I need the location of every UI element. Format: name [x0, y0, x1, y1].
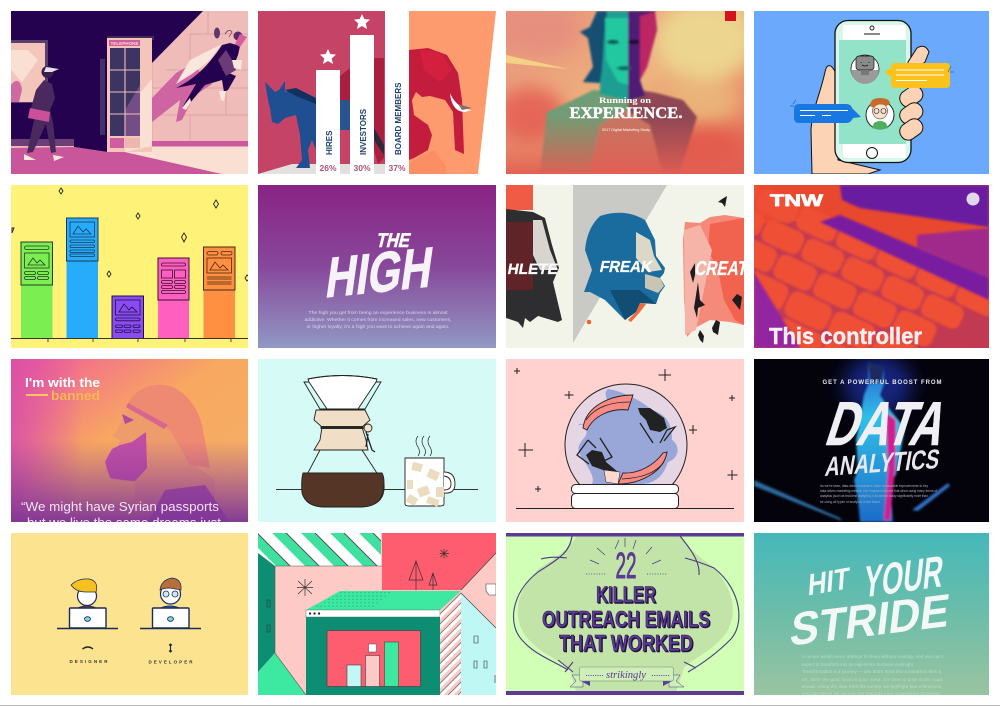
bottom shade — [11, 440, 248, 522]
sparkles — [297, 549, 449, 596]
chemex — [302, 376, 384, 507]
outline curves — [514, 536, 739, 672]
body copy: data-driven marketing metrics. Our research showed that when using many forms of — [820, 489, 937, 493]
black background — [754, 359, 989, 522]
word your: YOUR — [861, 547, 946, 608]
figure: runner — [176, 28, 247, 110]
red panel — [382, 533, 496, 590]
headline — [542, 582, 710, 656]
body copy: As we've seen, data-driven marketers make measurable improvements to key — [820, 484, 928, 488]
lit floor — [125, 146, 248, 174]
heading line one: I'm with the — [25, 375, 100, 390]
title line one: Running on — [599, 95, 651, 105]
purple gradient background — [258, 185, 496, 348]
headline line three: THAT WORKED — [559, 630, 693, 656]
hand behind — [811, 66, 880, 174]
panel: hit your stride — [754, 533, 989, 696]
icon: star over hires — [320, 49, 336, 64]
elephant — [340, 48, 472, 174]
body copy: ahead. Using the data from the survey, we highlight four milestones — [802, 684, 941, 689]
side stripes — [440, 591, 461, 695]
roof edges — [461, 553, 496, 628]
brush title — [787, 547, 953, 656]
floor line — [516, 508, 734, 510]
dash — [26, 394, 48, 396]
table line — [276, 488, 478, 490]
bar: orange — [204, 247, 235, 338]
speech tag — [486, 584, 496, 595]
brush word analytics: ANALYTICS — [823, 443, 942, 482]
body copy: you can strive for as you run towards your experience business. — [802, 691, 941, 696]
floor — [11, 147, 222, 174]
panel: telephone booth runner — [11, 11, 248, 174]
icon: curved arrow — [82, 647, 93, 649]
dark shadow — [11, 11, 203, 152]
pink background — [506, 359, 744, 522]
fingers — [897, 46, 929, 143]
figure: designer — [57, 579, 118, 628]
body copy: be using all types of analytics in the future. — [820, 500, 881, 504]
red field — [258, 11, 385, 174]
mug — [405, 436, 455, 507]
bubble: blue message — [794, 104, 861, 123]
panel: data analytics — [754, 359, 989, 522]
heading line two: banned — [51, 388, 100, 403]
hires label: HIRES — [325, 130, 334, 155]
portrait: bearded athlete — [506, 209, 562, 328]
word freak: FREAK — [598, 258, 654, 276]
icon: adobe logo — [725, 11, 736, 21]
figure head — [580, 11, 657, 100]
portrait: creator — [683, 215, 750, 337]
green triangle — [258, 653, 306, 695]
icon: tree large — [409, 561, 423, 590]
board members value: 37% — [388, 163, 406, 173]
headline line one: KILLER — [596, 582, 656, 608]
window controls — [310, 612, 319, 615]
brand name: strikingly — [606, 670, 647, 681]
body copy — [802, 654, 944, 696]
person upper — [583, 395, 675, 443]
phone — [835, 20, 911, 162]
heading — [25, 375, 100, 403]
body copy: A runner would never attempt to sleep without training. And you can't — [802, 654, 944, 659]
brush word the: THE — [374, 230, 413, 252]
kicker: GET A POWERFUL BOOST FROM — [822, 380, 942, 386]
orange dot — [587, 320, 591, 324]
label: developer: DEVELOPER — [148, 660, 193, 664]
telephone booth — [100, 36, 154, 152]
dark green screen — [306, 617, 440, 695]
panel: tnw this controller — [754, 185, 989, 349]
mint background — [258, 359, 496, 522]
hires value: 26% — [319, 163, 337, 173]
red field — [754, 185, 989, 348]
sparkle diamonds — [12, 188, 250, 281]
light streak — [506, 55, 568, 69]
globe — [565, 384, 687, 485]
panel: athlete freak creator portraits — [506, 185, 750, 348]
bar: investors — [350, 35, 374, 174]
number 22: 22 — [616, 545, 636, 586]
figure: walker — [24, 66, 64, 161]
panel: yellow bar chart of wireframes — [11, 185, 248, 348]
body copy: The high you get from being an experience business is almost — [308, 310, 448, 316]
icon: power dial — [966, 192, 980, 206]
green background — [506, 533, 744, 695]
bottom edge rule — [0, 705, 1000, 706]
purple areas — [754, 185, 989, 348]
yellow background — [11, 533, 248, 695]
headline: This controller — [769, 323, 922, 349]
spark marks — [790, 66, 954, 106]
quote line one: “We might have Syrian passports — [21, 499, 220, 514]
icon: tree small — [429, 573, 437, 590]
panel: chemex coffee maker — [258, 359, 496, 522]
icon: robot avatar — [851, 55, 879, 84]
wall outline — [275, 566, 382, 695]
halo — [844, 355, 912, 415]
pale blob — [518, 536, 733, 695]
globe base — [572, 484, 678, 508]
panel: running on experience — [506, 11, 744, 174]
birds — [690, 196, 742, 343]
icon: vertical arrow — [169, 644, 172, 652]
panel: killer outreach emails — [506, 533, 744, 695]
blue background — [754, 11, 989, 174]
bottom band — [506, 691, 744, 695]
booth label: TELEPHONE — [110, 41, 138, 46]
figure: running shadow — [152, 64, 212, 122]
teal gradient background — [754, 533, 989, 695]
portrait — [105, 385, 230, 522]
bar: blue — [66, 218, 98, 338]
ray lines — [590, 538, 661, 564]
word athlete: HLETE — [506, 261, 559, 278]
striped roof — [258, 533, 381, 566]
red strip — [506, 185, 533, 210]
word hit: HIT — [807, 561, 851, 603]
poster — [11, 40, 48, 103]
word stride: STRIDE — [787, 584, 953, 656]
body copy — [304, 310, 452, 330]
body copy: analytics (such as real-time analytics), it increased today significantly more than — [820, 494, 928, 498]
bar: green — [21, 242, 52, 338]
brick lines — [152, 11, 248, 152]
body copy: addictive. Whether it comes from increased sales, new customers, — [304, 317, 452, 323]
panel: board members bar chart with donkey and elephant — [258, 11, 496, 174]
label: designer: DESIGNER — [70, 659, 108, 664]
panel: designer and developer — [11, 533, 248, 695]
blue blob — [578, 389, 678, 484]
dotted rules — [586, 573, 667, 575]
bar chart — [327, 630, 420, 686]
body copy: 5K. With the goal fixed in your mind, it's time to look to the road — [802, 677, 943, 682]
grey wedge — [573, 185, 667, 343]
investors value: 30% — [353, 163, 371, 173]
paper background — [506, 185, 744, 348]
gradient background — [11, 359, 248, 522]
axis — [11, 338, 248, 342]
dark green wall — [258, 553, 275, 672]
light streaks — [754, 480, 950, 521]
bar: pink — [158, 258, 189, 338]
subtitle: 2017 Digital Marketing Study — [602, 128, 650, 132]
panel: i'm with the banned — [11, 359, 248, 530]
bar: board members — [385, 11, 409, 174]
grey floor — [258, 164, 385, 174]
quote line two: but we live the same dreams just — [27, 515, 221, 530]
roof dots — [312, 592, 392, 608]
bar: purple — [112, 296, 144, 338]
icon: star over investors — [354, 14, 370, 29]
tnw logo: TNW — [770, 191, 824, 210]
wall — [11, 11, 248, 174]
left tint — [11, 359, 131, 522]
pink base — [258, 533, 496, 695]
donkey — [265, 81, 384, 168]
lower haze — [506, 115, 744, 174]
low wall — [11, 139, 74, 146]
small windows — [267, 600, 270, 632]
top band — [506, 533, 744, 536]
brush title — [322, 230, 437, 311]
panel: snow globe — [506, 359, 744, 522]
orange field — [409, 11, 496, 174]
board members label: BOARD MEMBERS — [394, 82, 403, 155]
window bar — [306, 610, 440, 617]
light beam — [125, 79, 152, 152]
quote — [21, 499, 221, 530]
kerb — [152, 141, 248, 146]
body copy — [820, 484, 937, 504]
figure: developer — [140, 578, 201, 628]
investors label: INVESTORS — [359, 108, 368, 155]
neon figure — [854, 362, 905, 522]
panel: isometric building chart — [258, 533, 496, 695]
figure shoulders — [540, 88, 697, 172]
ribbon — [570, 667, 684, 687]
panel: chatbot on phone — [754, 11, 989, 174]
body copy: or higher loyalty, it's a high you want to achieve again and again. — [306, 324, 450, 330]
body copy: expect to transform into an experience business overnight. — [802, 662, 914, 667]
background glow — [495, 0, 755, 175]
icon: developer avatar — [866, 98, 894, 130]
house windows — [474, 636, 495, 683]
portrait: freak — [584, 213, 665, 322]
sunset background — [506, 11, 744, 174]
bar: hires — [316, 70, 340, 174]
panel: the high — [258, 185, 496, 348]
sparkles — [514, 368, 738, 492]
title — [570, 95, 683, 132]
person lower — [577, 438, 667, 484]
title line two: EXPERIENCE. — [570, 105, 683, 122]
brush word high: HIGH — [322, 236, 437, 311]
yellow background — [11, 185, 248, 348]
keyboard bed — [754, 218, 989, 348]
keyboard keys — [665, 168, 1000, 424]
light blue house — [461, 593, 496, 695]
body copy: Transformation is a journey — one that's more like a marathon than a — [802, 669, 942, 674]
building roof — [306, 591, 461, 610]
bubble: yellow message — [884, 63, 950, 88]
